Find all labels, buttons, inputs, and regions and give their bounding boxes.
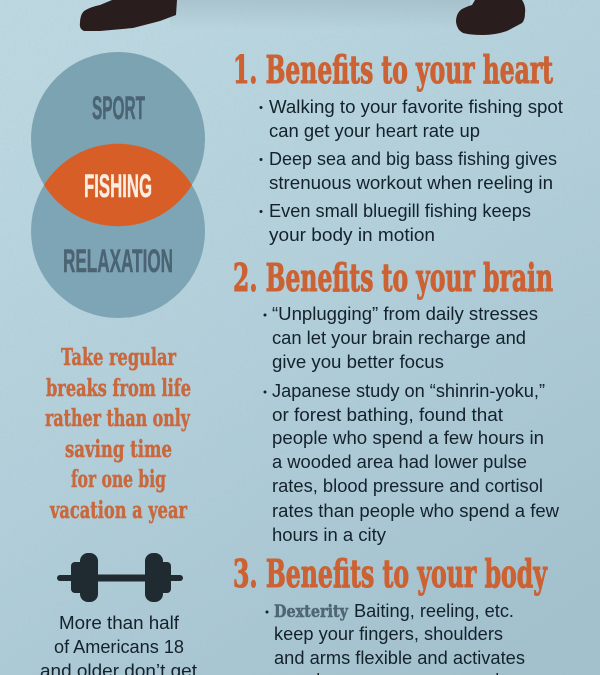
icon: left boot	[80, 0, 177, 31]
callout: regular breaks: Take regular	[61, 344, 177, 371]
label: fishing: FISHING	[84, 168, 152, 204]
list: brain benefits: hours in a city	[272, 525, 386, 545]
callout: regular breaks	[45, 344, 191, 524]
list: body benefits	[266, 601, 525, 675]
list: heart benefits: strenuous workout when reeling in	[269, 173, 553, 193]
overlap: fishing	[44, 144, 192, 226]
callout: regular breaks: saving time	[65, 436, 172, 463]
callout: regular breaks: breaks from life	[46, 375, 191, 402]
list: brain benefits	[264, 304, 560, 545]
list: body benefits: and arms flexible and activates	[274, 648, 525, 668]
list: brain benefits: or forest bathing, found that	[272, 405, 503, 425]
callout: regular breaks: vacation a year	[49, 497, 188, 524]
callout: regular breaks: rather than only	[45, 405, 190, 432]
list: heart benefits: Even small bluegill fishing keeps	[269, 201, 531, 221]
list: brain benefits: give you better focus	[272, 352, 444, 372]
venn diagram: SPORT	[92, 90, 145, 126]
list: heart benefits: your body in motion	[269, 225, 435, 245]
list: heart benefits	[260, 97, 563, 245]
list: brain benefits: a wooded area had lower pulse	[272, 452, 527, 472]
list: brain benefits: “Unplugging” from daily stresses	[272, 304, 538, 324]
circle: relaxation	[31, 144, 205, 318]
list: brain benefits: can let your brain recharge and	[272, 328, 526, 348]
label: relaxation: RELAXATION	[63, 243, 173, 279]
icon: right boot	[456, 0, 525, 35]
list: body benefits: Baiting, reeling, etc.	[354, 601, 514, 621]
callout: regular breaks: for one big	[71, 466, 166, 493]
list: heart benefits: Deep sea and big bass fishing gives	[269, 149, 557, 169]
list: body benefits: keep your fingers, shoulders	[274, 624, 503, 644]
text block: exercise statistic: of Americans 18	[54, 637, 184, 657]
list: brain benefits: rates than people who spend a few	[272, 501, 560, 521]
list: brain benefits: rates, blood pressure and cortisol	[272, 476, 543, 496]
icon: dumbbell	[57, 553, 183, 602]
text block: exercise statistic: More than half	[59, 613, 180, 633]
list: heart benefits: can get your heart rate up	[269, 121, 480, 141]
list: body benefits: Dexterity	[274, 602, 349, 622]
text block: exercise statistic	[40, 613, 197, 675]
venn diagram	[31, 52, 205, 318]
list: heart benefits: Walking to your favorite fishing spot	[269, 97, 563, 117]
circle: sport	[31, 52, 205, 226]
list: brain benefits: Japanese study on “shinrin-yoku,”	[272, 381, 545, 401]
list: brain benefits: people who spend a few hours in	[272, 428, 544, 448]
